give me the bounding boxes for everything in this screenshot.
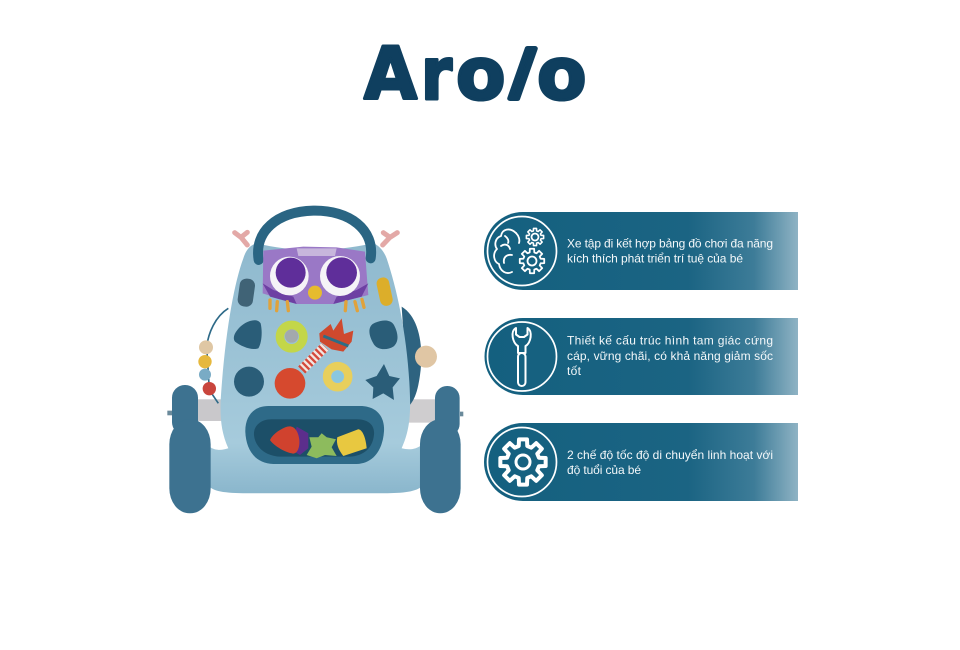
text: feature one: Xe tập đi kết hợp bảng đồ chơi đa năng	[567, 236, 773, 250]
panel: triangular structure feature	[484, 318, 798, 395]
shape sorter holes	[234, 320, 400, 400]
text: feature three	[567, 448, 773, 477]
handle	[258, 211, 371, 260]
title: Arolo logo: o	[456, 32, 505, 116]
text: feature two: Thiết kế cấu trúc hình tam giác cứng	[567, 334, 773, 348]
text: feature one: kích thích phát triển trí tuệ của bé	[567, 252, 743, 266]
text: feature three: độ tuổi của bé	[567, 463, 641, 477]
icon: brain and gears	[494, 228, 544, 273]
antlers	[235, 232, 397, 245]
rings	[280, 325, 348, 387]
icon: wrench	[513, 328, 531, 386]
illustration: baby walker toy	[167, 211, 463, 513]
title: Arolo logo: r	[421, 32, 452, 116]
text: feature two: cáp, vững chãi, có khả năng giảm sốc	[567, 349, 773, 363]
text: feature one	[567, 236, 773, 266]
body and base	[209, 243, 422, 493]
beads	[198, 340, 437, 395]
title: Arolo logo: /	[510, 37, 536, 108]
title: Arolo logo: o	[537, 32, 586, 116]
title: Arolo logo: A	[364, 32, 417, 116]
bead wire and rear bulge	[207, 307, 421, 407]
tray with shapes	[245, 406, 384, 464]
owl toy	[263, 247, 368, 311]
panel: brain development feature	[484, 212, 798, 290]
text: feature two: tốt	[567, 364, 582, 378]
text: feature three: 2 chế độ tốc độ di chuyển linh hoạt với	[567, 448, 773, 462]
back wheels and axles	[167, 385, 463, 436]
panel: two speed modes feature	[484, 423, 798, 501]
side panels: mirror and stripe toy	[237, 276, 394, 308]
icon: gear	[500, 439, 546, 485]
title: Arolo logo	[364, 32, 586, 116]
front wheels	[169, 419, 461, 513]
toy wrench	[275, 318, 353, 399]
text: feature two	[567, 334, 773, 378]
